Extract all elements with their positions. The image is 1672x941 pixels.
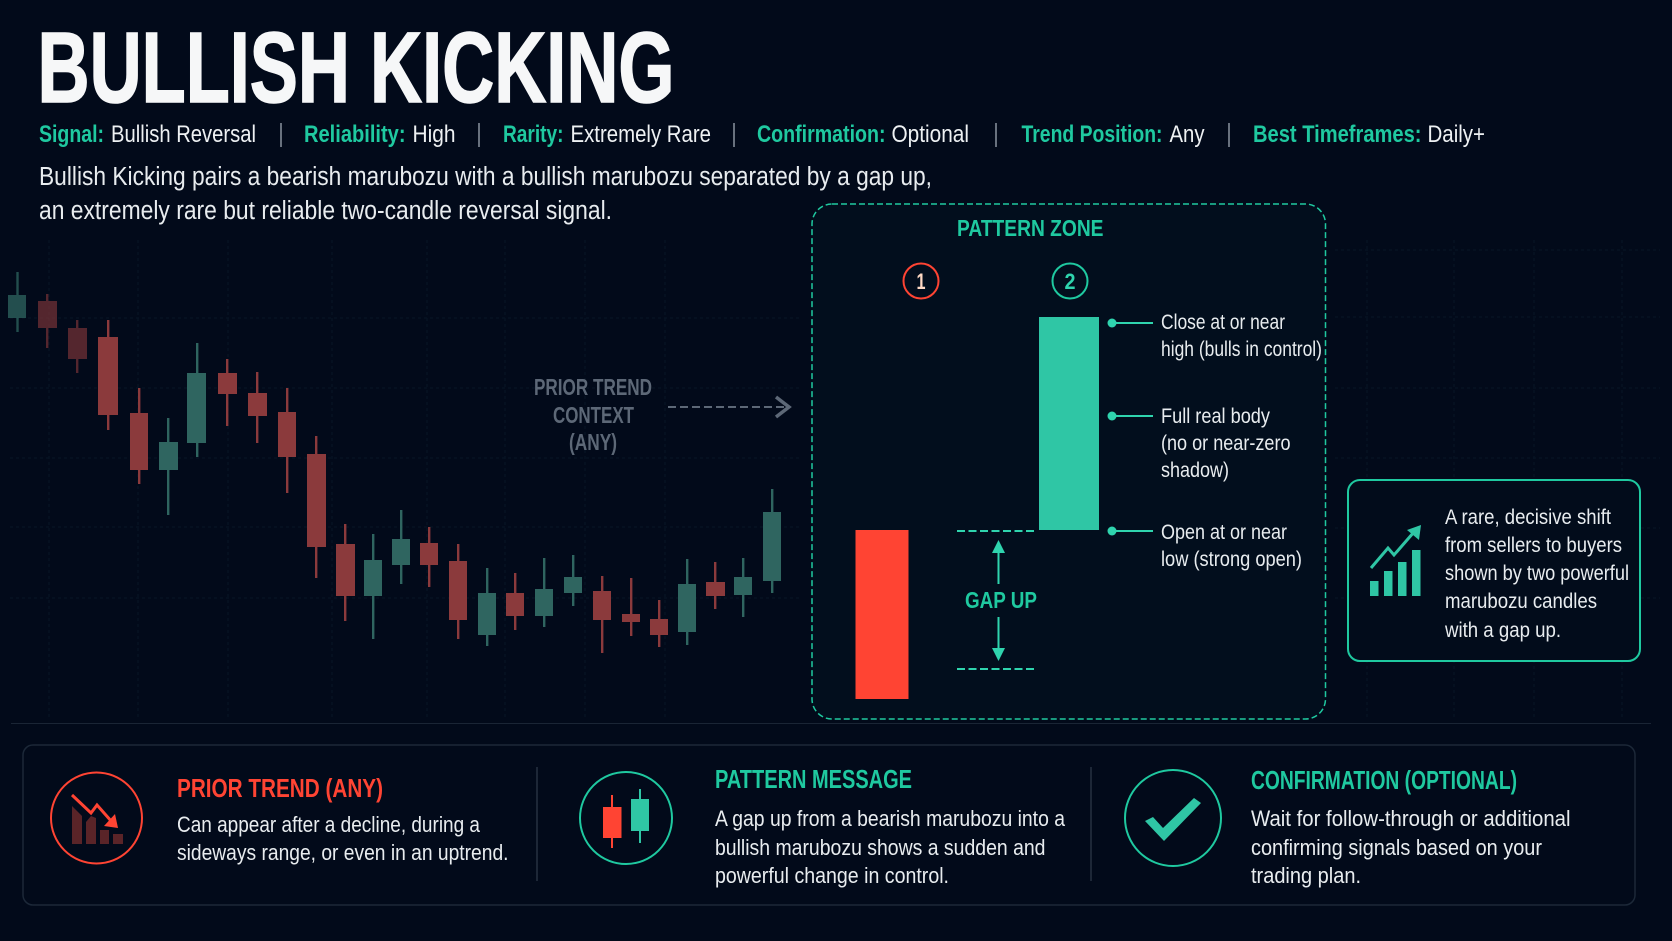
- pattern message text: PATTERN MESSAGE: [715, 766, 912, 794]
- callout: full real body: shadow): [1161, 458, 1229, 482]
- panel: pattern zone: [812, 204, 1326, 719]
- callout: open near low: low (strong open): [1161, 547, 1302, 571]
- metadata row: Trend Position:: [1022, 121, 1162, 148]
- prior trend text: PRIOR TREND (ANY): [177, 775, 383, 803]
- metadata row: Extremely Rare: [570, 121, 711, 148]
- metadata row: Best Timeframes:: [1253, 121, 1422, 148]
- confirmation text: Wait for follow-through or additional: [1251, 806, 1570, 831]
- bearish marubozu candle: [856, 530, 908, 699]
- metadata row: Signal:: [39, 121, 104, 148]
- metadata row: Rarity:: [503, 121, 564, 148]
- gap up marker: [957, 531, 1037, 669]
- confirmation text: [1251, 767, 1570, 888]
- callout: open near low: Open at or near: [1161, 520, 1287, 544]
- icon: declining trend: [51, 772, 142, 864]
- marker 2: [1052, 264, 1088, 298]
- prior trend text: sideways range, or even in an uptrend.: [177, 840, 508, 865]
- callout: full real body: [1108, 404, 1291, 482]
- takeaway text: from sellers to buyers: [1445, 533, 1622, 557]
- metadata row: Reliability:: [304, 121, 406, 148]
- prior trend text: Can appear after a decline, during a: [177, 812, 481, 837]
- candlestick chart: prior trend: [8, 272, 781, 653]
- description: an extremely rare but reliable two-candle reversal signal.: [39, 197, 612, 225]
- metadata row: Bullish Reversal: [111, 121, 256, 148]
- icon: rising bars: [1370, 525, 1421, 596]
- callout: close near high: high (bulls in control): [1161, 337, 1322, 361]
- icon: check mark: [1125, 770, 1221, 866]
- takeaway text: A rare, decisive shift: [1445, 505, 1611, 529]
- confirmation text: confirming signals based on your: [1251, 835, 1542, 860]
- pattern zone heading: PATTERN ZONE: [957, 215, 1104, 241]
- metadata row: [39, 121, 1485, 148]
- prior trend text: [177, 775, 508, 865]
- pattern message text: bullish marubozu shows a sudden and: [715, 835, 1046, 860]
- callout: full real body: Full real body: [1161, 404, 1270, 428]
- pattern message text: powerful change in control.: [715, 863, 949, 888]
- marker 1: [904, 264, 938, 298]
- description: [39, 163, 932, 225]
- prior trend context label: CONTEXT: [553, 402, 634, 428]
- confirmation text: trading plan.: [1251, 863, 1361, 888]
- marker 1: 1: [916, 269, 926, 294]
- prior trend context label: PRIOR TREND: [534, 374, 652, 400]
- metadata row: Confirmation:: [757, 121, 886, 148]
- prior trend context label: [534, 374, 652, 455]
- callout: close near high: Close at or near: [1161, 310, 1285, 334]
- arrow: context to pattern zone: [668, 397, 789, 417]
- gap up marker: GAP UP: [965, 587, 1037, 613]
- confirmation text: CONFIRMATION (OPTIONAL): [1251, 767, 1517, 795]
- panel: bottom summary: [23, 745, 1635, 905]
- panel: takeaway: [1348, 480, 1640, 661]
- marker 2: 2: [1064, 269, 1076, 294]
- title: BULLISH KICKING: [38, 12, 674, 124]
- bullish marubozu candle: [1039, 317, 1099, 530]
- metadata row: Any: [1170, 121, 1204, 148]
- callout: full real body: (no or near-zero: [1161, 431, 1291, 455]
- metadata row: Optional: [892, 121, 969, 148]
- pattern message text: A gap up from a bearish marubozu into a: [715, 806, 1066, 831]
- takeaway text: with a gap up.: [1444, 618, 1561, 642]
- metadata row: High: [412, 121, 456, 148]
- pattern message text: [715, 766, 1066, 888]
- metadata row: Daily+: [1428, 121, 1485, 148]
- takeaway text: shown by two powerful: [1445, 561, 1629, 585]
- takeaway text: marubozu candles: [1445, 589, 1597, 613]
- takeaway text: [1444, 505, 1629, 642]
- callout: close near high: [1108, 310, 1322, 361]
- callout: open near low: [1108, 520, 1302, 571]
- icon: two candles: [580, 772, 672, 864]
- prior trend context label: (ANY): [569, 429, 617, 455]
- description: Bullish Kicking pairs a bearish marubozu with a bullish marubozu separated by a gap up,: [39, 163, 932, 191]
